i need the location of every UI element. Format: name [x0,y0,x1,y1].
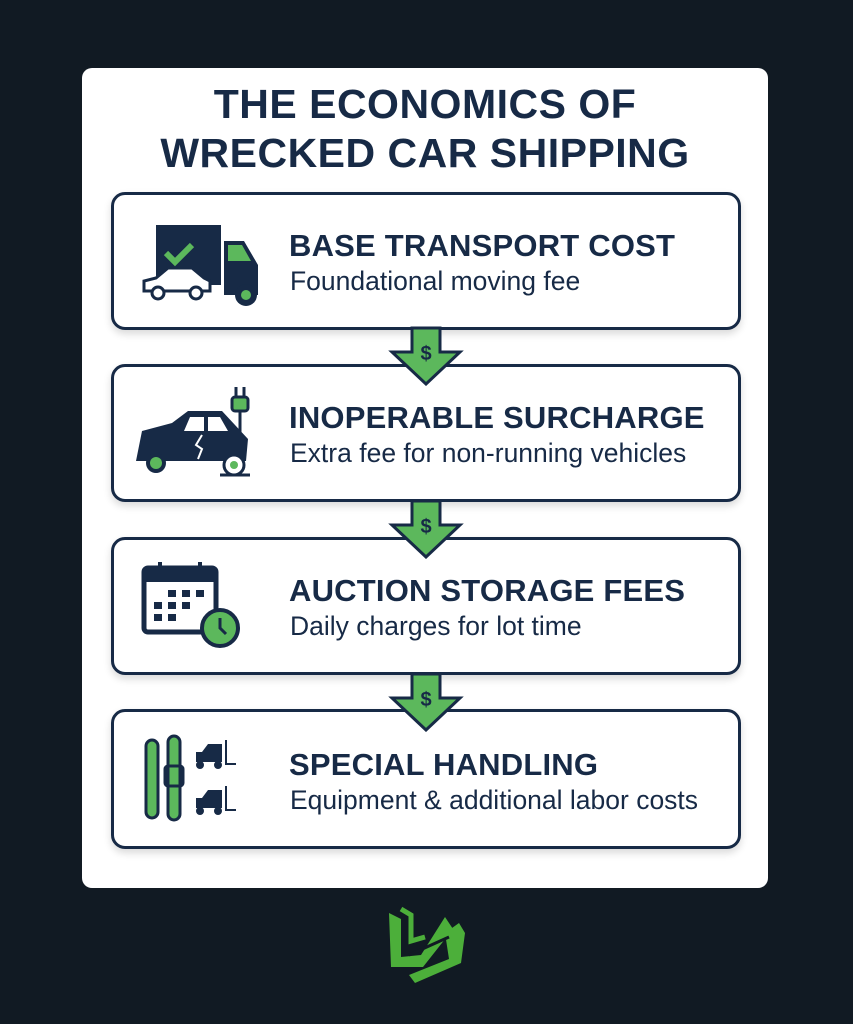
subtitle: Foundational moving fee [290,266,580,296]
arrow 3 [388,675,464,732]
arrow 1: $ [420,343,432,365]
icon: calendar with clock [142,562,240,648]
arrow 1 [388,326,464,386]
logo [389,906,465,983]
panel: special handling [111,709,741,849]
arrow 2 [388,502,464,559]
arrow 3: $ [420,689,432,711]
panel: auction storage: Daily charges for lot time [290,611,582,641]
panel: inoperable: Extra fee for non-running vehicles [290,438,686,468]
title: THE ECONOMICS OF [214,81,636,127]
panel: inoperable [111,364,741,502]
title: WRECKED CAR SHIPPING [160,130,690,176]
icon: wrecked car with hook [136,387,250,476]
arrow 2: $ [420,516,432,538]
panel: base transport [111,192,741,330]
panel: auction storage [111,537,741,675]
panel: inoperable: INOPERABLE SURCHARGE [289,400,705,435]
icon: truck with car [142,225,258,306]
panel: auction storage: AUCTION STORAGE FEES [289,573,685,608]
icon: straps and forklifts [144,734,236,822]
title [160,81,690,176]
panel: special handling: SPECIAL HANDLING [289,747,598,782]
heading: BASE TRANSPORT COST [289,228,675,263]
card [82,68,768,888]
panel: special handling: Equipment & additional labor costs [290,785,698,815]
